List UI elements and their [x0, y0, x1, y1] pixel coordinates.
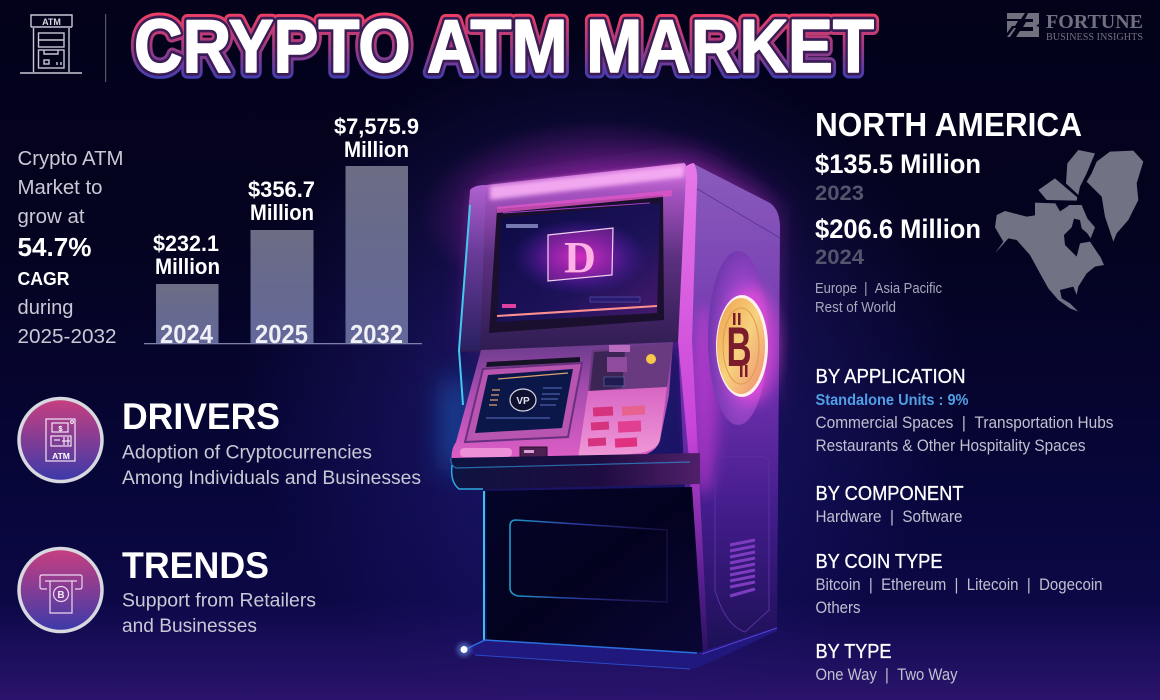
panel: by component: BY COMPONENT	[816, 483, 964, 505]
panel: drivers: Adoption of Cryptocurrencies	[122, 442, 372, 464]
bar chart: $7,575.9	[334, 114, 419, 139]
icon: ATM circle	[19, 398, 102, 482]
divider	[105, 14, 106, 82]
bar chart: Million	[344, 137, 409, 162]
slot	[486, 357, 580, 367]
cabinet inset panel	[510, 520, 667, 602]
bar chart: Million	[250, 200, 314, 225]
panel: by coin type: Bitcoin | Ethereum | Litecoin | Dogecoin	[816, 576, 1102, 594]
text block: North America: Europe | Asia Pacific	[815, 281, 942, 297]
panel: drivers	[19, 396, 421, 489]
logo: Fortune Business Insights: FORTUNE	[1046, 12, 1143, 33]
panel: trends	[19, 545, 316, 637]
top module	[588, 343, 673, 392]
panel: by coin type: BY COIN TYPE	[816, 551, 942, 573]
text block: North America: 2024	[815, 246, 864, 269]
lower band	[451, 453, 700, 490]
front upper	[460, 163, 687, 352]
panel: drivers: DRIVERS	[122, 396, 280, 437]
panel: by coin type: Others	[816, 599, 860, 617]
text block: CAGR	[18, 147, 124, 348]
bar chart: Million	[155, 254, 220, 279]
bar chart: 2024	[160, 321, 214, 349]
panel: trends: TRENDS	[122, 545, 269, 586]
title: CRYPTO ATM MARKET	[134, 4, 874, 88]
icon: ATM outline header: ATM	[42, 17, 61, 27]
small screen	[465, 363, 582, 442]
text block: North America: NORTH AMERICA	[815, 107, 1082, 144]
panel: by type: One Way | Two Way	[816, 666, 958, 684]
panel: by type	[816, 641, 958, 684]
text block: CAGR: during	[18, 296, 74, 319]
panel: by application: BY APPLICATION	[816, 366, 966, 388]
text block: North America	[815, 107, 1082, 316]
map: North America	[995, 150, 1143, 312]
side face	[678, 163, 780, 652]
icon: ATM circle: $	[58, 424, 63, 433]
panel: by application	[816, 366, 1114, 455]
side vent	[730, 540, 755, 596]
front side edge	[678, 163, 708, 652]
text block: North America: Rest of World	[815, 300, 896, 316]
side pink wash	[690, 305, 718, 495]
cyan edge	[483, 491, 485, 640]
base plate	[464, 627, 777, 669]
left strip	[460, 185, 486, 350]
bitcoin coin: B	[726, 316, 752, 378]
bar chart: 2025	[255, 321, 308, 349]
card slots	[460, 448, 512, 457]
text block: CAGR: 2025-2032	[18, 325, 117, 348]
title: CRYPTO ATM MARKET	[134, 4, 874, 88]
keypad	[578, 387, 667, 459]
text block: North America: $206.6 Million	[815, 214, 981, 244]
illustration: crypto ATM machine	[445, 160, 780, 669]
bar chart	[144, 114, 422, 349]
bitcoin coin	[716, 295, 768, 397]
logo: Fortune Business Insights	[1007, 12, 1143, 43]
bar chart: $356.7	[248, 177, 315, 202]
recessed circle on side	[708, 251, 768, 425]
panel: trends: Support from Retailers	[122, 590, 316, 612]
glow	[445, 160, 775, 470]
text block: CAGR: CAGR	[18, 268, 70, 289]
glow around coin	[726, 287, 778, 403]
title: CRYPTO ATM MARKET	[134, 4, 874, 88]
small screen: VP	[516, 396, 530, 407]
panel: by type: BY TYPE	[816, 641, 892, 663]
text block: North America: 2023	[815, 182, 864, 205]
panel: by component	[816, 483, 964, 526]
panel: by coin type	[816, 551, 1102, 617]
icon: cash slot circle	[19, 548, 102, 632]
text block: North America: $135.5 Million	[815, 149, 981, 179]
lamp	[646, 354, 656, 364]
top highlight	[490, 165, 684, 200]
panel: by component: Hardware | Software	[816, 508, 962, 526]
lower cabinet	[486, 487, 703, 653]
logo: Fortune Business Insights: BUSINESS INSIGHTS	[1046, 32, 1143, 43]
panel: trends: and Businesses	[122, 616, 257, 637]
base spark	[457, 642, 471, 656]
text block: CAGR: Crypto ATM	[18, 147, 124, 170]
text block: CAGR: grow at	[18, 205, 85, 228]
text block: CAGR: 54.7%	[18, 234, 92, 262]
icon: cash slot circle: B	[57, 590, 65, 601]
screen: D	[564, 233, 596, 282]
bar chart: 2032	[350, 321, 403, 349]
side lower panel	[715, 457, 769, 632]
icon: ATM circle: ATM	[52, 451, 70, 461]
panel: by application: Restaurants & Other Hospitality Spaces	[816, 437, 1086, 455]
screen bezel	[489, 195, 664, 333]
panel: drivers: Among Individuals and Businesses	[122, 468, 421, 489]
bar chart: $232.1	[153, 231, 219, 256]
text block: CAGR: Market to	[18, 176, 102, 199]
panel: by application: Standalone Units : 9%	[816, 392, 969, 409]
screen	[497, 203, 660, 322]
panel: by application: Commercial Spaces | Transportation Hubs	[816, 414, 1114, 432]
icon: ATM outline header	[20, 15, 82, 73]
console	[452, 342, 673, 464]
